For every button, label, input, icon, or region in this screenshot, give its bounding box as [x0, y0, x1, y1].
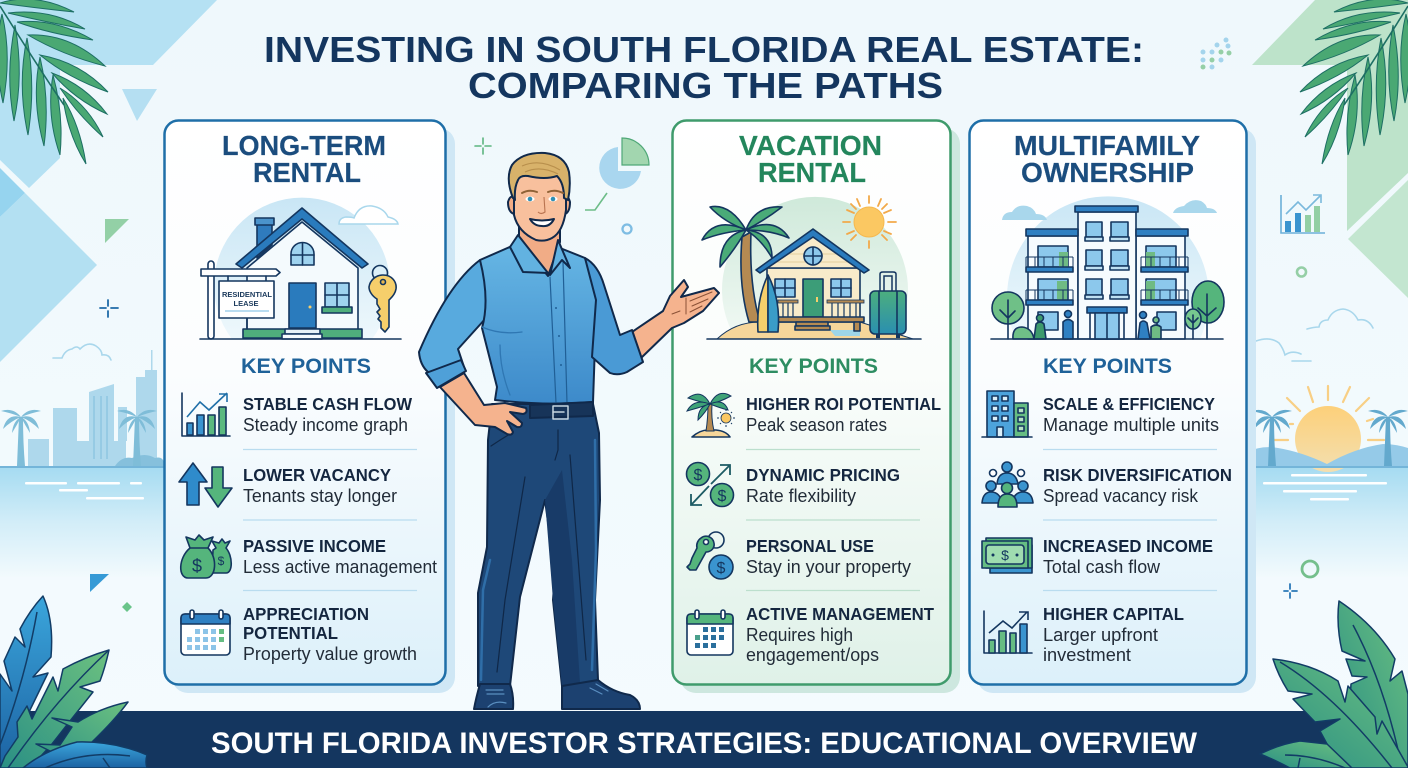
heading: long-term rental: RENTAL	[253, 157, 361, 188]
heading: key points: KEY POINTS	[749, 355, 878, 378]
heading: key points: KEY POINTS	[1043, 355, 1172, 378]
icon: background growth chart	[1281, 195, 1325, 233]
palm frond: top right	[1300, 0, 1408, 164]
icon: palm and sun	[687, 393, 735, 437]
panel: long-term rental	[164, 120, 455, 693]
text: higher roi potential: Peak season rates	[746, 415, 887, 435]
icon: group of people	[982, 462, 1033, 507]
title	[264, 29, 1144, 106]
decoration: center pie chart and accents	[475, 138, 649, 234]
decoration: small left accents	[53, 300, 132, 612]
panel: multifamily ownership	[970, 120, 1256, 693]
panel: vacation rental	[672, 120, 960, 693]
text: stable cash flow	[243, 394, 412, 435]
background: left geometric shapes	[0, 0, 217, 362]
sign text	[222, 290, 272, 308]
right forearm and hand	[632, 280, 719, 360]
residents	[1034, 310, 1161, 339]
text: passive income: PASSIVE INCOME	[243, 536, 386, 556]
text: active management	[746, 604, 934, 665]
text: dynamic pricing: Rate flexibility	[746, 486, 856, 506]
icon: cash stack	[982, 538, 1032, 573]
banner text: SOUTH FLORIDA INVESTOR STRATEGIES: EDUCATIONAL OVERVIEW	[211, 727, 1198, 760]
trees	[992, 281, 1224, 339]
text: dynamic pricing: DYNAMIC PRICING	[746, 465, 900, 485]
title: COMPARING THE PATHS	[468, 65, 943, 106]
text: increased income: Total cash flow	[1043, 557, 1161, 577]
text: higher capital: HIGHER CAPITAL	[1043, 604, 1184, 624]
icon: dynamic pricing coins	[686, 462, 734, 506]
heading: multifamily ownership: OWNERSHIP	[1021, 157, 1194, 188]
text: personal use: PERSONAL USE	[746, 536, 874, 556]
heading: multifamily ownership	[1014, 130, 1200, 188]
text: increased income	[1043, 536, 1213, 577]
text: scale and efficiency	[1043, 394, 1219, 435]
icon: calendar	[181, 610, 230, 655]
text: personal use	[746, 536, 911, 577]
text: active management: engagement/ops	[746, 645, 879, 665]
tropical leaves: bottom right	[1260, 601, 1408, 768]
icon: up and down arrows	[179, 463, 232, 507]
heading: vacation rental: VACATION	[739, 130, 882, 161]
heading: long-term rental: LONG-TERM	[222, 130, 386, 161]
heading: multifamily ownership: MULTIFAMILY	[1014, 130, 1200, 161]
sign text: LEASE	[233, 299, 259, 308]
icon: rising capital chart	[984, 611, 1032, 653]
text: appreciation potential: APPRECIATION	[243, 604, 369, 624]
text: active management: ACTIVE MANAGEMENT	[746, 604, 934, 624]
text: higher capital: Larger upfront	[1043, 625, 1158, 645]
text: lower vacancy: Tenants stay longer	[243, 486, 397, 506]
scene: right sunset and water	[1240, 386, 1408, 577]
icon: income chart	[182, 393, 230, 436]
text: risk diversification: RISK DIVERSIFICATION	[1043, 465, 1232, 485]
title: INVESTING IN SOUTH FLORIDA REAL ESTATE:	[264, 29, 1144, 70]
heading: vacation rental: RENTAL	[758, 157, 866, 188]
text: scale and efficiency: SCALE & EFFICIENCY	[1043, 394, 1215, 414]
text: passive income: Less active management	[243, 557, 437, 577]
trousers	[478, 404, 600, 686]
head	[508, 153, 570, 241]
icon: money bags: $	[218, 554, 225, 568]
text: stable cash flow: Steady income graph	[243, 415, 408, 435]
text: active management: Requires high	[746, 625, 853, 645]
text: risk diversification	[1043, 465, 1232, 506]
text: risk diversification: Spread vacancy risk	[1043, 486, 1199, 506]
heading: vacation rental	[739, 130, 882, 188]
icon: money bags	[181, 535, 231, 578]
text: dynamic pricing	[746, 465, 900, 506]
text: higher roi potential: HIGHER ROI POTENTIAL	[746, 394, 941, 414]
text: personal use: Stay in your property	[746, 557, 911, 577]
left forearm and hand	[440, 373, 527, 435]
building windows	[1038, 222, 1176, 330]
icon: key and coin: $	[717, 560, 726, 577]
icon: dynamic pricing coins: $	[694, 467, 703, 484]
right shirt sleeve	[585, 258, 643, 374]
illustration: rental house with sign and key	[200, 198, 401, 339]
icon: money bags: $	[192, 556, 202, 576]
belt	[530, 402, 593, 419]
illustration: apartment building	[991, 196, 1224, 339]
text: appreciation potential	[243, 604, 417, 664]
icon: dynamic pricing coins: $	[718, 488, 727, 505]
shirt torso	[480, 246, 597, 404]
text: higher capital: investment	[1043, 645, 1131, 665]
icon: calendar	[687, 610, 733, 655]
neck and collar	[510, 222, 570, 276]
icon: cash stack: $	[1001, 547, 1009, 563]
icon: key and coin	[687, 532, 733, 579]
bottom banner	[0, 711, 1408, 768]
decoration: small right accents	[1200, 38, 1373, 598]
sign text: RESIDENTIAL	[222, 290, 272, 299]
text: stable cash flow: STABLE CASH FLOW	[243, 394, 412, 414]
text: scale and efficiency: Manage multiple units	[1043, 415, 1219, 435]
tropical leaves: bottom left	[0, 596, 147, 768]
shirt cuff	[426, 360, 466, 388]
scene: left skyline and water	[0, 350, 170, 577]
illustration: beach house with palm, sun and luggage	[702, 196, 921, 339]
palm frond: top left	[0, 0, 108, 164]
text: lower vacancy	[243, 465, 397, 506]
left shirt sleeve	[419, 260, 492, 387]
text: appreciation potential: Property value growth	[243, 644, 417, 664]
background: right geometric shapes	[1252, 0, 1408, 298]
text: higher roi potential	[746, 394, 941, 435]
text: lower vacancy: LOWER VACANCY	[243, 465, 391, 485]
heading: key points: KEY POINTS	[241, 355, 371, 378]
heading: long-term rental	[222, 130, 386, 188]
text: appreciation potential: POTENTIAL	[243, 623, 338, 643]
figure: smiling presenter	[419, 153, 719, 709]
text: higher capital	[1043, 604, 1184, 665]
icon: buildings	[982, 391, 1032, 437]
text: passive income	[243, 536, 437, 577]
shoes	[474, 680, 640, 709]
text: increased income: INCREASED INCOME	[1043, 536, 1213, 556]
